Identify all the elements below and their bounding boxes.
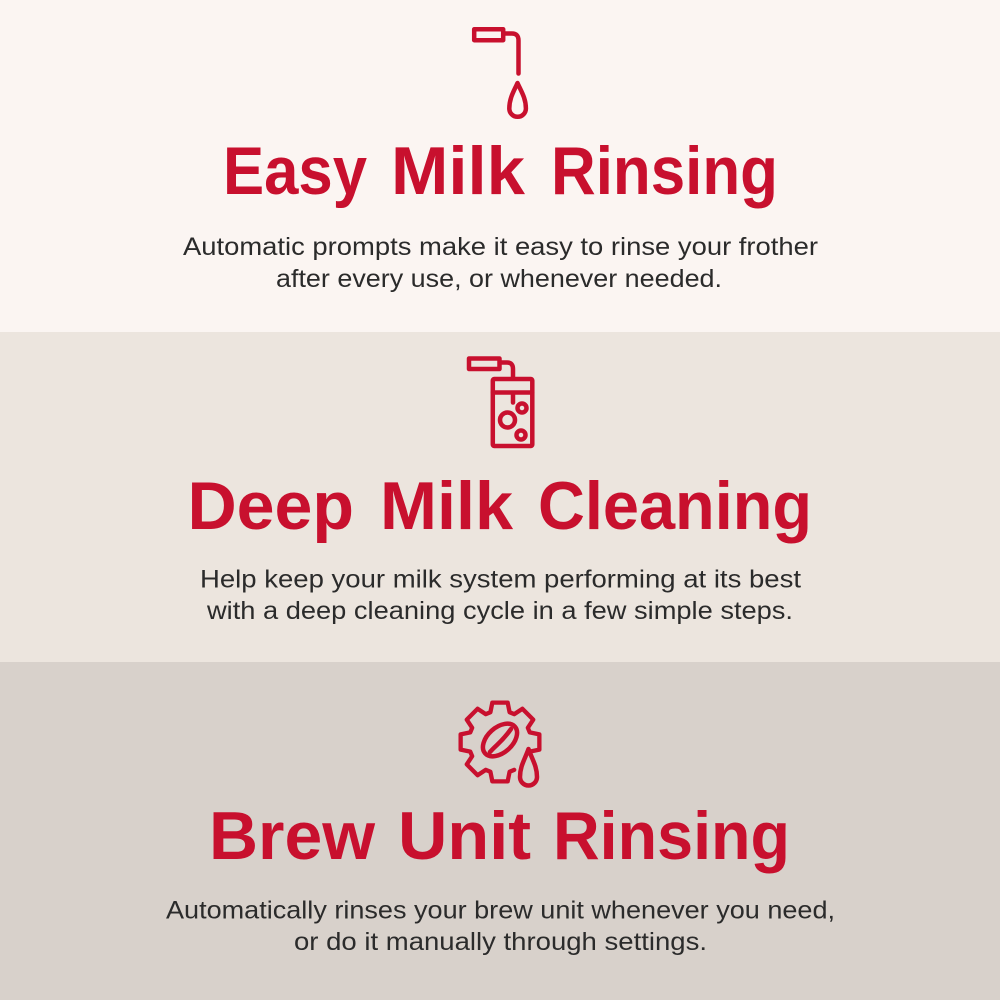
panel: deep milk cleaning — [0, 332, 1000, 662]
heading: deep milk cleaning — [188, 469, 812, 544]
icon: frother spout with milk drop — [474, 29, 526, 117]
heading: deep milk cleaning: Deep — [188, 469, 354, 544]
description: deep milk cleaning: Help keep your milk system performing at its best — [200, 566, 801, 594]
heading: brew unit rinsing — [209, 799, 790, 874]
heading: brew unit rinsing: Brew — [209, 799, 375, 874]
description: brew unit rinsing — [166, 896, 835, 956]
description: deep milk cleaning: with a deep cleaning cycle in a few simple steps. — [206, 597, 793, 625]
panel: brew unit rinsing — [0, 662, 1000, 1000]
heading: easy milk rinsing — [223, 134, 778, 209]
description: deep milk cleaning — [200, 566, 801, 625]
description: easy milk rinsing — [183, 233, 818, 293]
heading: easy milk rinsing: Rinsing — [551, 134, 778, 209]
heading: deep milk cleaning: Cleaning — [538, 469, 812, 544]
panel: easy milk rinsing — [0, 0, 1000, 332]
icon: spout over glass with bubbles — [469, 358, 532, 446]
heading: easy milk rinsing: Milk — [391, 134, 525, 209]
description: brew unit rinsing: or do it manually through settings. — [294, 928, 707, 956]
heading: deep milk cleaning: Milk — [380, 469, 513, 544]
description: easy milk rinsing: Automatic prompts make it easy to rinse your frother — [183, 233, 818, 261]
description: easy milk rinsing: after every use, or whenever needed. — [276, 265, 722, 293]
description: brew unit rinsing: Automatically rinses your brew unit whenever you need, — [166, 896, 835, 924]
heading: brew unit rinsing: Unit — [398, 799, 531, 874]
icon: gear with coffee bean and drop — [461, 703, 539, 786]
heading: brew unit rinsing: Rinsing — [553, 799, 790, 874]
heading: easy milk rinsing: Easy — [223, 134, 367, 209]
